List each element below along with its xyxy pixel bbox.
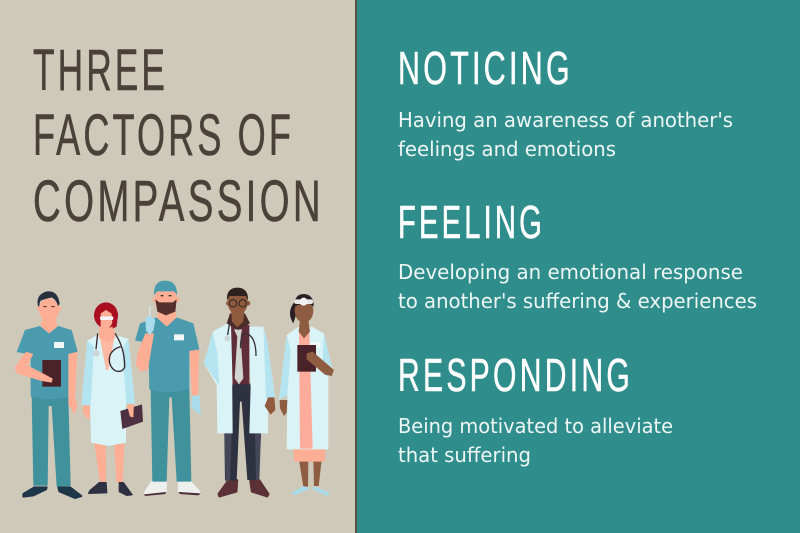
title: COMPASSION xyxy=(33,169,324,234)
panel: left background xyxy=(0,0,356,533)
icon: female doctor with head mirror xyxy=(279,294,334,495)
title: THREE xyxy=(33,38,168,103)
icon: male doctor with glasses xyxy=(204,288,275,497)
icon: bearded surgeon xyxy=(135,281,201,496)
text: noticing description: feelings and emotions xyxy=(398,137,616,161)
text: responding description: Being motivated to alleviate xyxy=(398,414,673,438)
text: noticing description: Having an awareness of another's xyxy=(398,108,733,132)
section: responding xyxy=(398,349,673,467)
title xyxy=(33,38,324,234)
icon: male nurse with clipboard xyxy=(15,291,81,498)
text: feeling description: to another's suffering & experiences xyxy=(398,289,757,313)
text: responding description xyxy=(398,414,673,467)
section: feeling xyxy=(398,196,757,313)
panel: right background xyxy=(356,0,800,533)
heading: responding: RESPONDING xyxy=(398,349,633,401)
heading: noticing: NOTICING xyxy=(398,42,573,94)
text: responding description: that suffering xyxy=(398,443,531,467)
icon: female doctor with red hair xyxy=(81,302,143,495)
title: FACTORS OF xyxy=(33,103,294,168)
section: noticing xyxy=(398,42,733,161)
text: feeling description xyxy=(398,260,757,313)
heading: feeling: FEELING xyxy=(398,196,545,248)
illustration: medical staff xyxy=(15,281,334,498)
text: noticing description xyxy=(398,108,733,161)
text: feeling description: Developing an emotional response xyxy=(398,260,743,284)
